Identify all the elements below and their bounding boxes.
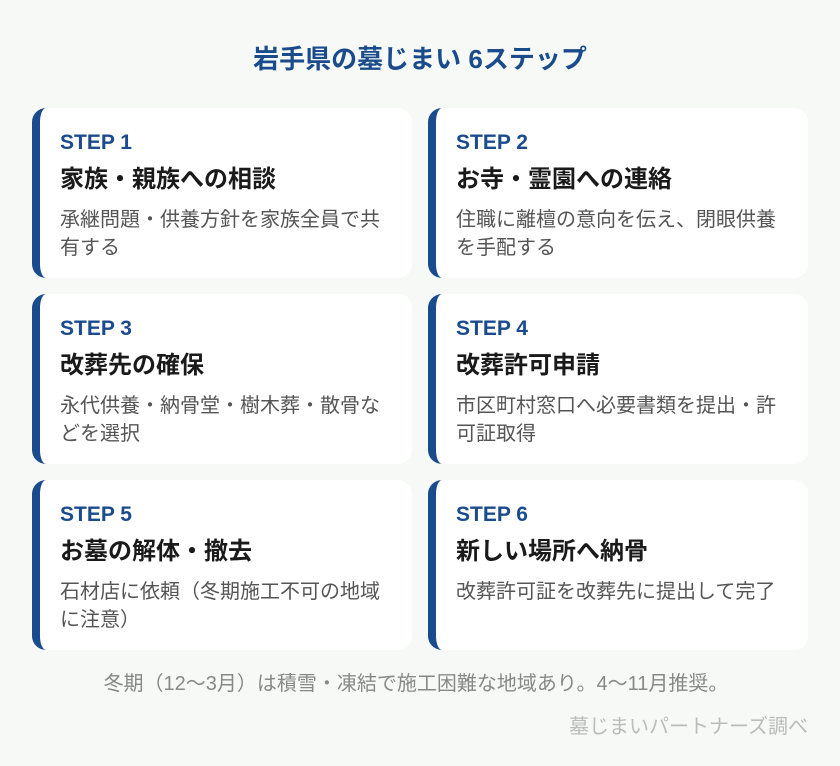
step 5 heading: お墓の解体・撤去: [60, 538, 252, 565]
step 4 description: 市区町村窓口へ必要書類を提出・許可証取得: [456, 395, 776, 445]
step 6 heading: 新しい場所へ納骨: [456, 538, 648, 565]
step 2 heading: お寺・霊園への連絡: [456, 166, 672, 193]
step 3 label: STEP 3: [60, 317, 132, 340]
step 4 heading: 改葬許可申請: [456, 352, 600, 379]
panel: step 2: [428, 108, 808, 278]
step 2 description: 住職に離檀の意向を伝え、閉眼供養を手配する: [456, 209, 776, 259]
step 6 label: STEP 6: [456, 503, 528, 526]
step 1 description: 承継問題・供養方針を家族全員で共有する: [60, 209, 380, 259]
source credit: 墓じまいパートナーズ調べ: [569, 716, 808, 738]
step 5 label: STEP 5: [60, 503, 132, 526]
panel: step 4: [428, 294, 808, 464]
panel: step 3: [32, 294, 412, 464]
seasonal note: 冬期（12～3月）は積雪・凍結で施工困難な地域あり。4～11月推奨。: [104, 673, 728, 695]
step 1 heading: 家族・親族への相談: [60, 166, 276, 193]
step 6 description: 改葬許可証を改葬先に提出して完了: [456, 581, 775, 603]
step 4 label: STEP 4: [456, 317, 528, 340]
title: 岩手県の墓じまい 6ステップ: [253, 44, 587, 74]
panel: step 5: [32, 480, 412, 650]
panel: step 1: [32, 108, 412, 278]
step 5 description: 石材店に依頼（冬期施工不可の地域に注意）: [60, 581, 380, 631]
panel: step 6: [428, 480, 808, 650]
step 3 description: 永代供養・納骨堂・樹木葬・散骨などを選択: [60, 395, 380, 445]
step 2 label: STEP 2: [456, 131, 528, 154]
step 3 heading: 改葬先の確保: [60, 352, 204, 379]
step 1 label: STEP 1: [60, 131, 132, 154]
